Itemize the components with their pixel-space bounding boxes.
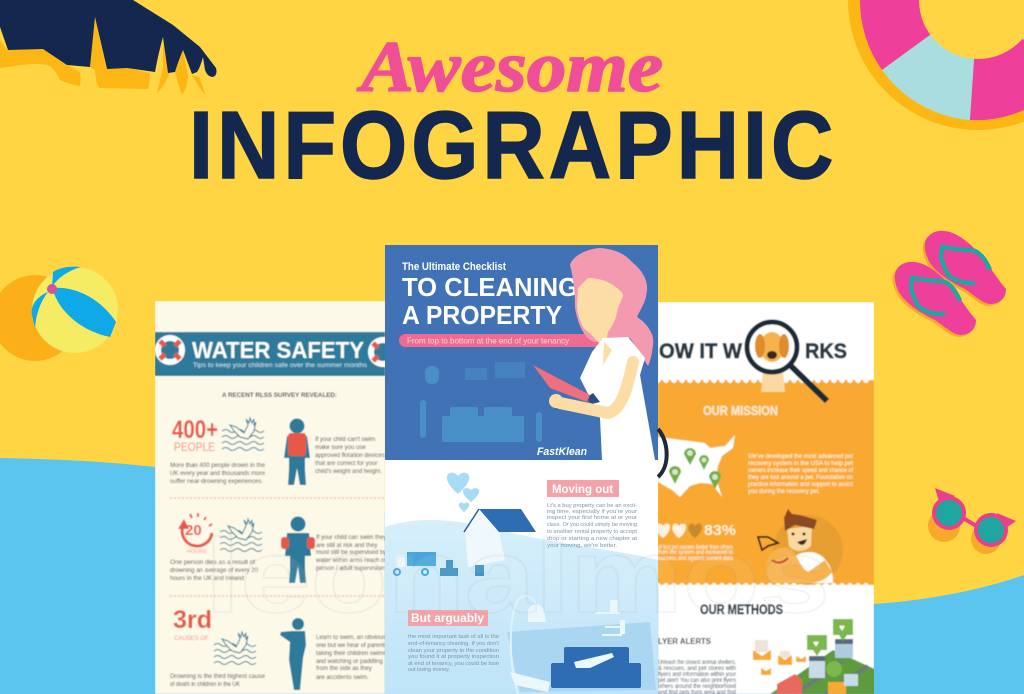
illustration: isometric city xyxy=(770,619,877,694)
but arguably text: clean your property to the condition xyxy=(408,648,499,654)
icon: beach umbrella xyxy=(0,0,216,95)
flyer alerts text: others around the neighborhood xyxy=(658,684,736,690)
tip: flotation: child's weight and height. xyxy=(315,469,382,475)
flyer alerts text xyxy=(658,660,736,694)
map: USA with pins xyxy=(658,435,735,497)
heading: how it works: OW IT W xyxy=(659,340,742,363)
icon: sunglasses xyxy=(928,488,1016,554)
icon: dog under magnifier xyxy=(747,322,827,401)
stat: 20 hours: One person dies as a result of xyxy=(170,560,255,566)
stat: 400+ people: PEOPLE xyxy=(174,440,215,454)
tip: learn to swim xyxy=(316,634,385,680)
moving out text: class. Or you could simply be moving xyxy=(547,522,637,528)
stat: 3rd cause: Drowning is the third highest cause xyxy=(170,674,266,680)
tip: supervision xyxy=(315,535,386,572)
subtitle bar xyxy=(399,334,604,347)
stat: 83 percent: success and against current data xyxy=(658,556,734,562)
heading: to cleaning a property: A PROPERTY xyxy=(402,300,562,330)
moving out text: Lt's a buy property can be an excit- xyxy=(547,503,637,509)
tip: flotation: make sure you use xyxy=(315,445,366,451)
icon: flip-flops xyxy=(893,231,1006,337)
tip: supervision: must still be supervised by xyxy=(316,550,386,556)
but arguably text: the most important task of all is the xyxy=(408,634,499,640)
figure: child with armbands xyxy=(281,516,315,583)
but arguably text: you found it at property inspection xyxy=(408,654,499,660)
flyer alerts text: flyers and information within your xyxy=(658,672,736,678)
heading: how it works: RKS xyxy=(805,340,847,363)
stat: 20 hours: hours in the UK and Ireland xyxy=(170,576,244,582)
illustration: envelopes xyxy=(753,640,806,675)
but arguably text: end-of-tenancy cleaning. If you don't xyxy=(408,641,499,647)
figure: standing child xyxy=(280,618,306,690)
panel: how it works poster xyxy=(656,302,877,694)
moving out text xyxy=(547,503,637,549)
callout: but arguably: But arguably xyxy=(411,611,484,625)
panel: water safety poster xyxy=(155,301,396,694)
tip: learn to swim: Learn to swim, an obvious xyxy=(316,635,386,641)
stat: 3rd cause: of death in children in the UK xyxy=(170,682,240,688)
heading: to cleaning a property xyxy=(402,278,575,324)
tip: supervision: water within arms reach of xyxy=(315,558,386,564)
stat: 83 percent: of lost pet owners Better than others xyxy=(658,545,733,551)
orange section xyxy=(658,380,874,585)
mission text: We've developed the most advanced pet xyxy=(748,454,853,460)
panel: cleaning checklist poster xyxy=(385,245,658,694)
illustration: woman with clipboard xyxy=(533,248,655,460)
but arguably text xyxy=(408,634,499,673)
tip: supervision: If your child can swim they xyxy=(316,535,386,541)
logo: FastKlean: FastKlean xyxy=(537,446,587,458)
icon: beach ball xyxy=(0,267,118,361)
heading: to cleaning a property: TO CLEANING xyxy=(402,272,578,302)
stat: 400+ people: More than 400 people drown in the xyxy=(170,463,266,469)
callout: moving out: Moving out xyxy=(552,482,613,496)
tip: learn to swim: are accidents swim. xyxy=(316,675,369,681)
stat: 20 hours: drowning an average of every 20 xyxy=(170,568,259,574)
icon: swim ring xyxy=(848,0,1024,130)
moving out text: your moving, we're better. xyxy=(547,543,617,549)
illustration: faint room xyxy=(420,362,542,442)
heading: flyer alerts: LYER ALERTS xyxy=(658,637,712,646)
poster header xyxy=(385,245,658,460)
stat: 20 hours: 20 xyxy=(185,522,202,539)
illustration: man hugging dog xyxy=(758,509,843,585)
title: INFOGRAPHIC: INFOGRAPHIC xyxy=(189,92,833,199)
mission text: recovery system in the USA to help pet xyxy=(748,461,853,467)
lower hill background xyxy=(385,520,658,694)
illustration: isometric city: ♥ xyxy=(813,639,819,650)
mission text: practice information and support to assist xyxy=(748,482,853,488)
banner: water safety: Tips to keep your children safe over the summer months xyxy=(193,362,368,369)
stat: 83 percent: from the system and increased to xyxy=(658,550,734,556)
stat: 3rd cause xyxy=(170,606,266,688)
flip-flop back xyxy=(923,231,1006,306)
illustration: isometric city: ♥ xyxy=(839,623,845,634)
figure: child in life vest xyxy=(284,418,310,485)
stat: 400+ people: suffer near-drowning experiences. xyxy=(170,479,263,485)
illustration: house xyxy=(464,509,536,567)
stat: 3rd cause: CAUSES OF xyxy=(174,636,209,642)
mission text xyxy=(748,454,853,495)
subtitle bar: From top to bottom at the end of your tenancy xyxy=(407,336,569,346)
moving out text: to another rental property to accept xyxy=(547,529,637,535)
magnifier ring fragment xyxy=(658,429,667,477)
sea xyxy=(0,458,1024,694)
but arguably text: at end of tenancy, you could be lose xyxy=(408,661,499,667)
but arguably text: out losing money. xyxy=(408,667,450,673)
tip: supervision: person / adult supervision xyxy=(316,566,384,572)
tip: supervision: are still at risk and they xyxy=(316,543,377,549)
tip: learn to swim: one but we hear of parents xyxy=(316,643,387,649)
banner: water safety xyxy=(155,332,395,376)
tip: flotation: approved flotation devices xyxy=(315,453,385,459)
banner: water safety: WATER SAFETY xyxy=(192,337,364,363)
flyer alerts text: pet alert! You can also print flyers xyxy=(658,678,736,684)
mission text: you during the recovery pet. xyxy=(748,489,820,495)
title: Awesome: Awesome xyxy=(357,27,663,107)
tip: flotation xyxy=(315,437,385,475)
heading: our methods: OUR METHODS xyxy=(700,602,783,617)
moving out text: ing time, especially if you're your xyxy=(547,509,637,515)
watermark: leonalmos xyxy=(205,518,830,635)
tip: learn to swim: and watching or paddling xyxy=(316,659,383,665)
illustration: truck and boxes xyxy=(394,552,484,576)
survey heading: A RECENT RLSS SURVEY REVEALED: xyxy=(222,393,337,399)
heading: how it works xyxy=(658,342,848,360)
stat: 20 hours: HOURS xyxy=(187,549,207,555)
stat: 83 percent xyxy=(656,522,736,562)
tip: flotation: If your child can't swim xyxy=(315,437,375,443)
tip: learn to swim: from the side as they xyxy=(316,666,372,672)
stat: 20 hours xyxy=(170,513,262,582)
icon: hearts xyxy=(447,473,479,512)
title xyxy=(189,27,833,199)
stat: 83 percent: 83% xyxy=(704,522,736,539)
mission text: they are lost around a pet. Foundation on xyxy=(748,475,853,481)
stat: 3rd cause: 3rd xyxy=(173,606,212,634)
mission text: owners increase their speed and chance of xyxy=(748,468,853,474)
illustration: living room xyxy=(507,596,656,694)
moving out text: inspect your first home at or your xyxy=(547,515,637,521)
heading: our mission: OUR MISSION xyxy=(703,404,778,418)
tip: learn to swim: taking their children swimming xyxy=(316,651,396,657)
flyer alerts text: & rescues, and pet stores with xyxy=(658,666,736,672)
flip-flop front xyxy=(893,262,976,337)
stat: 400+ people: 400+ xyxy=(172,416,218,444)
tip: flotation: that are correct for your xyxy=(315,461,377,467)
heading: the ultimate checklist: The Ultimate Checklist xyxy=(402,261,506,273)
stat: 400+ people: UK every year and thousands more xyxy=(170,471,266,477)
moving out text: drop or starting a new chapter at xyxy=(547,536,637,542)
flyer alerts text: Unleash the closest animal shelters, xyxy=(658,660,736,666)
stat: 400+ people xyxy=(170,416,266,485)
